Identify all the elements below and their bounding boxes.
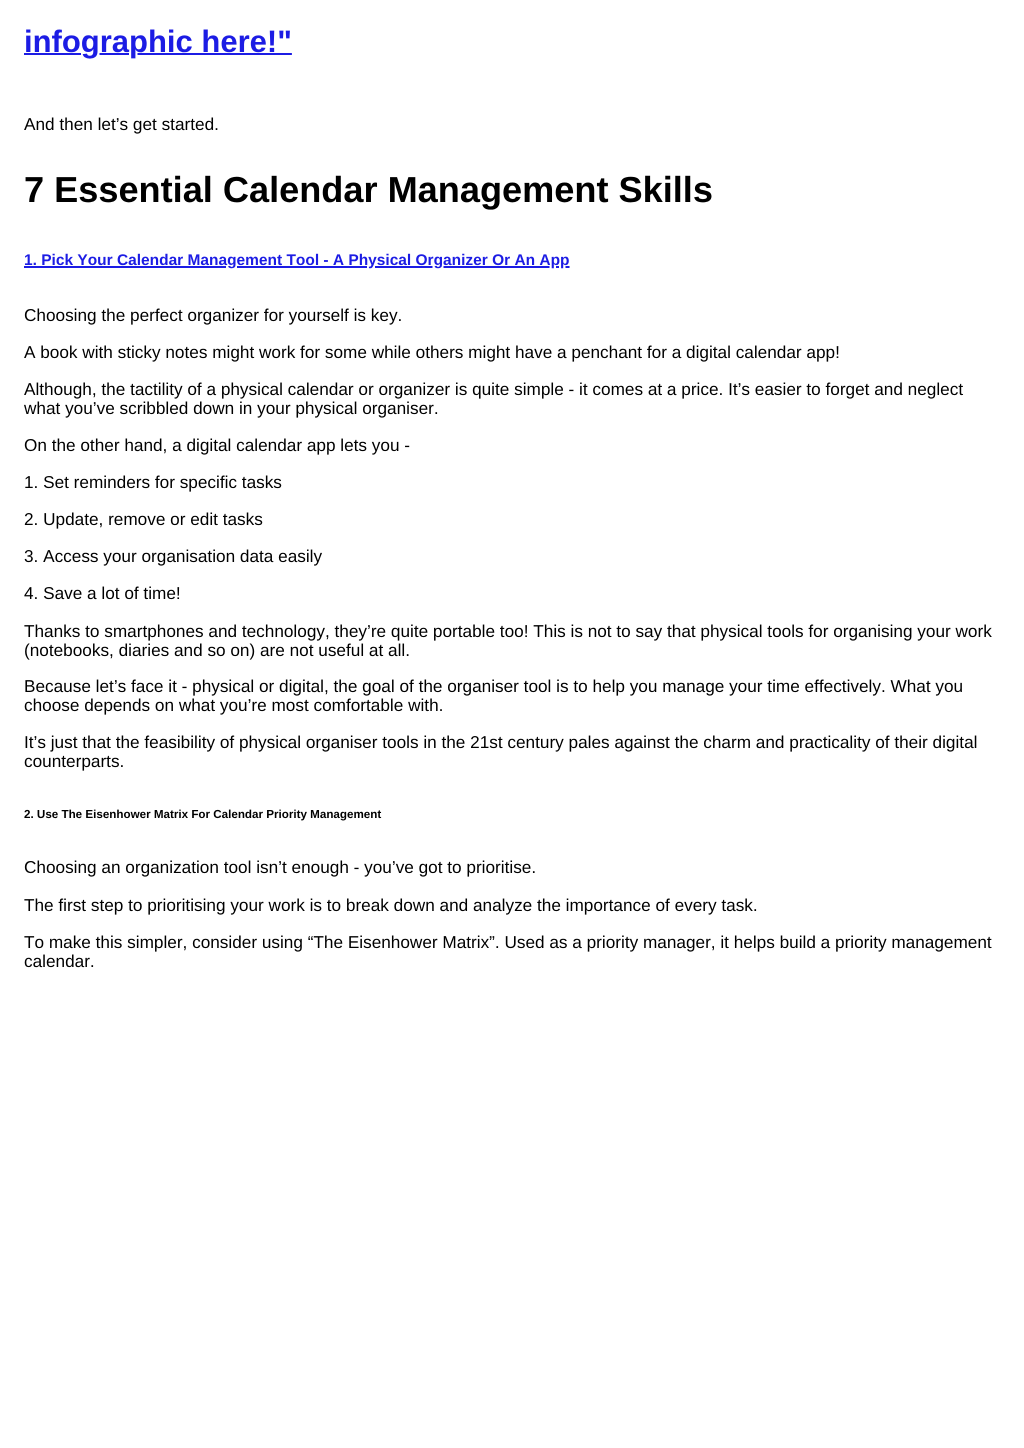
heading: section 2: 2. Use The Eisenhower Matrix For Calendar Priority Management bbox=[24, 808, 381, 821]
text: intro: And then let’s get started. bbox=[24, 114, 219, 134]
text: physical or digital: choose depends on what you’re most comfortable with. bbox=[24, 695, 443, 715]
text: tactility bbox=[24, 379, 964, 418]
list item 2: 2. Update, remove or edit tasks bbox=[24, 509, 263, 529]
text: smartphones: (notebooks, diaries and so on) are not useful at all. bbox=[24, 640, 410, 660]
text: feasibility: counterparts. bbox=[24, 751, 124, 771]
text: first step: The first step to prioritising your work is to break down and analyze the importance of every task. bbox=[24, 895, 758, 915]
text: tactility: what you’ve scribbled down in your physical organiser. bbox=[24, 398, 439, 418]
text: physical or digital: Because let’s face it - physical or digital, the goal of the organiser tool is to help you manage your time effectively. What you bbox=[24, 676, 963, 696]
list item 1: 1. Set reminders for specific tasks bbox=[24, 472, 282, 492]
list item 4: 4. Save a lot of time! bbox=[24, 583, 181, 603]
text: Eisenhower Matrix: To make this simpler, consider using “The Eisenhower Matrix”. Used as a priority manager, it helps build a priority management bbox=[24, 932, 992, 952]
text: smartphones bbox=[24, 621, 992, 660]
text: book with sticky notes: A book with sticky notes might work for some while others might have a penchant for a digital calendar app! bbox=[24, 342, 840, 362]
text: smartphones: Thanks to smartphones and technology, they’re quite portable too! This is not to say that physical tools for organising your work bbox=[24, 621, 992, 641]
title: 7 Essential Calendar Management Skills bbox=[24, 169, 713, 210]
text: physical or digital bbox=[24, 676, 963, 715]
list item 3: 3. Access your organisation data easily bbox=[24, 546, 322, 566]
text: digital app lead-in: On the other hand, a digital calendar app lets you - bbox=[24, 435, 410, 455]
text: Eisenhower Matrix bbox=[24, 932, 992, 971]
text: Eisenhower Matrix: calendar. bbox=[24, 951, 95, 971]
heading: section 1: 1. Pick Your Calendar Management Tool - A Physical Organizer Or An App bbox=[24, 252, 570, 269]
heading: link: infographic here!" bbox=[24, 24, 292, 59]
text: prioritise: Choosing an organization tool isn’t enough - you’ve got to prioritise. bbox=[24, 857, 536, 877]
text: tactility: Although, the tactility of a physical calendar or organizer is quite simple - it comes at a price. It’s easier to forget and neglect bbox=[24, 379, 963, 399]
text: feasibility bbox=[24, 732, 977, 771]
text: choosing organizer: Choosing the perfect organizer for yourself is key. bbox=[24, 305, 402, 325]
text: feasibility: It’s just that the feasibility of physical organiser tools in the 21st century pales against the charm and practicality of their digital bbox=[24, 732, 977, 752]
